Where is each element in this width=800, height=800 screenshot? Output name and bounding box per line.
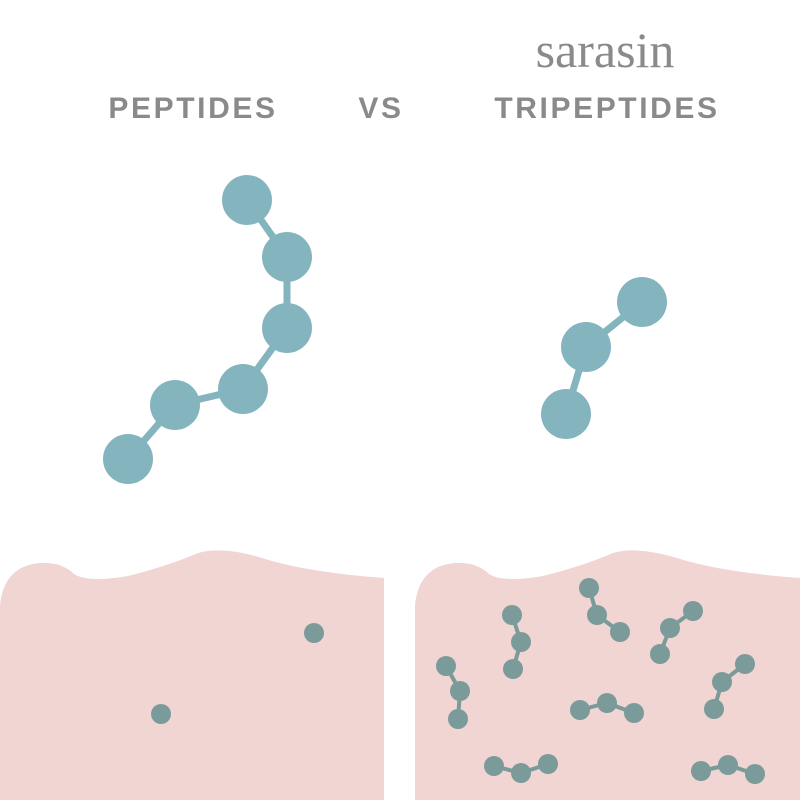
logo: sarasin: sarasin [536, 22, 674, 78]
absorbed tripeptides (many) [436, 578, 765, 784]
heading: vs: VS [358, 92, 404, 125]
molecule: peptide chain [103, 175, 312, 484]
heading: peptides: PEPTIDES [108, 92, 278, 125]
heading: tripeptides: TRIPEPTIDES [494, 92, 720, 125]
molecule: tripeptide [541, 277, 667, 439]
absorbed peptides (few) [151, 623, 324, 724]
panel: skin left [0, 550, 384, 800]
panel: skin right [415, 550, 800, 800]
